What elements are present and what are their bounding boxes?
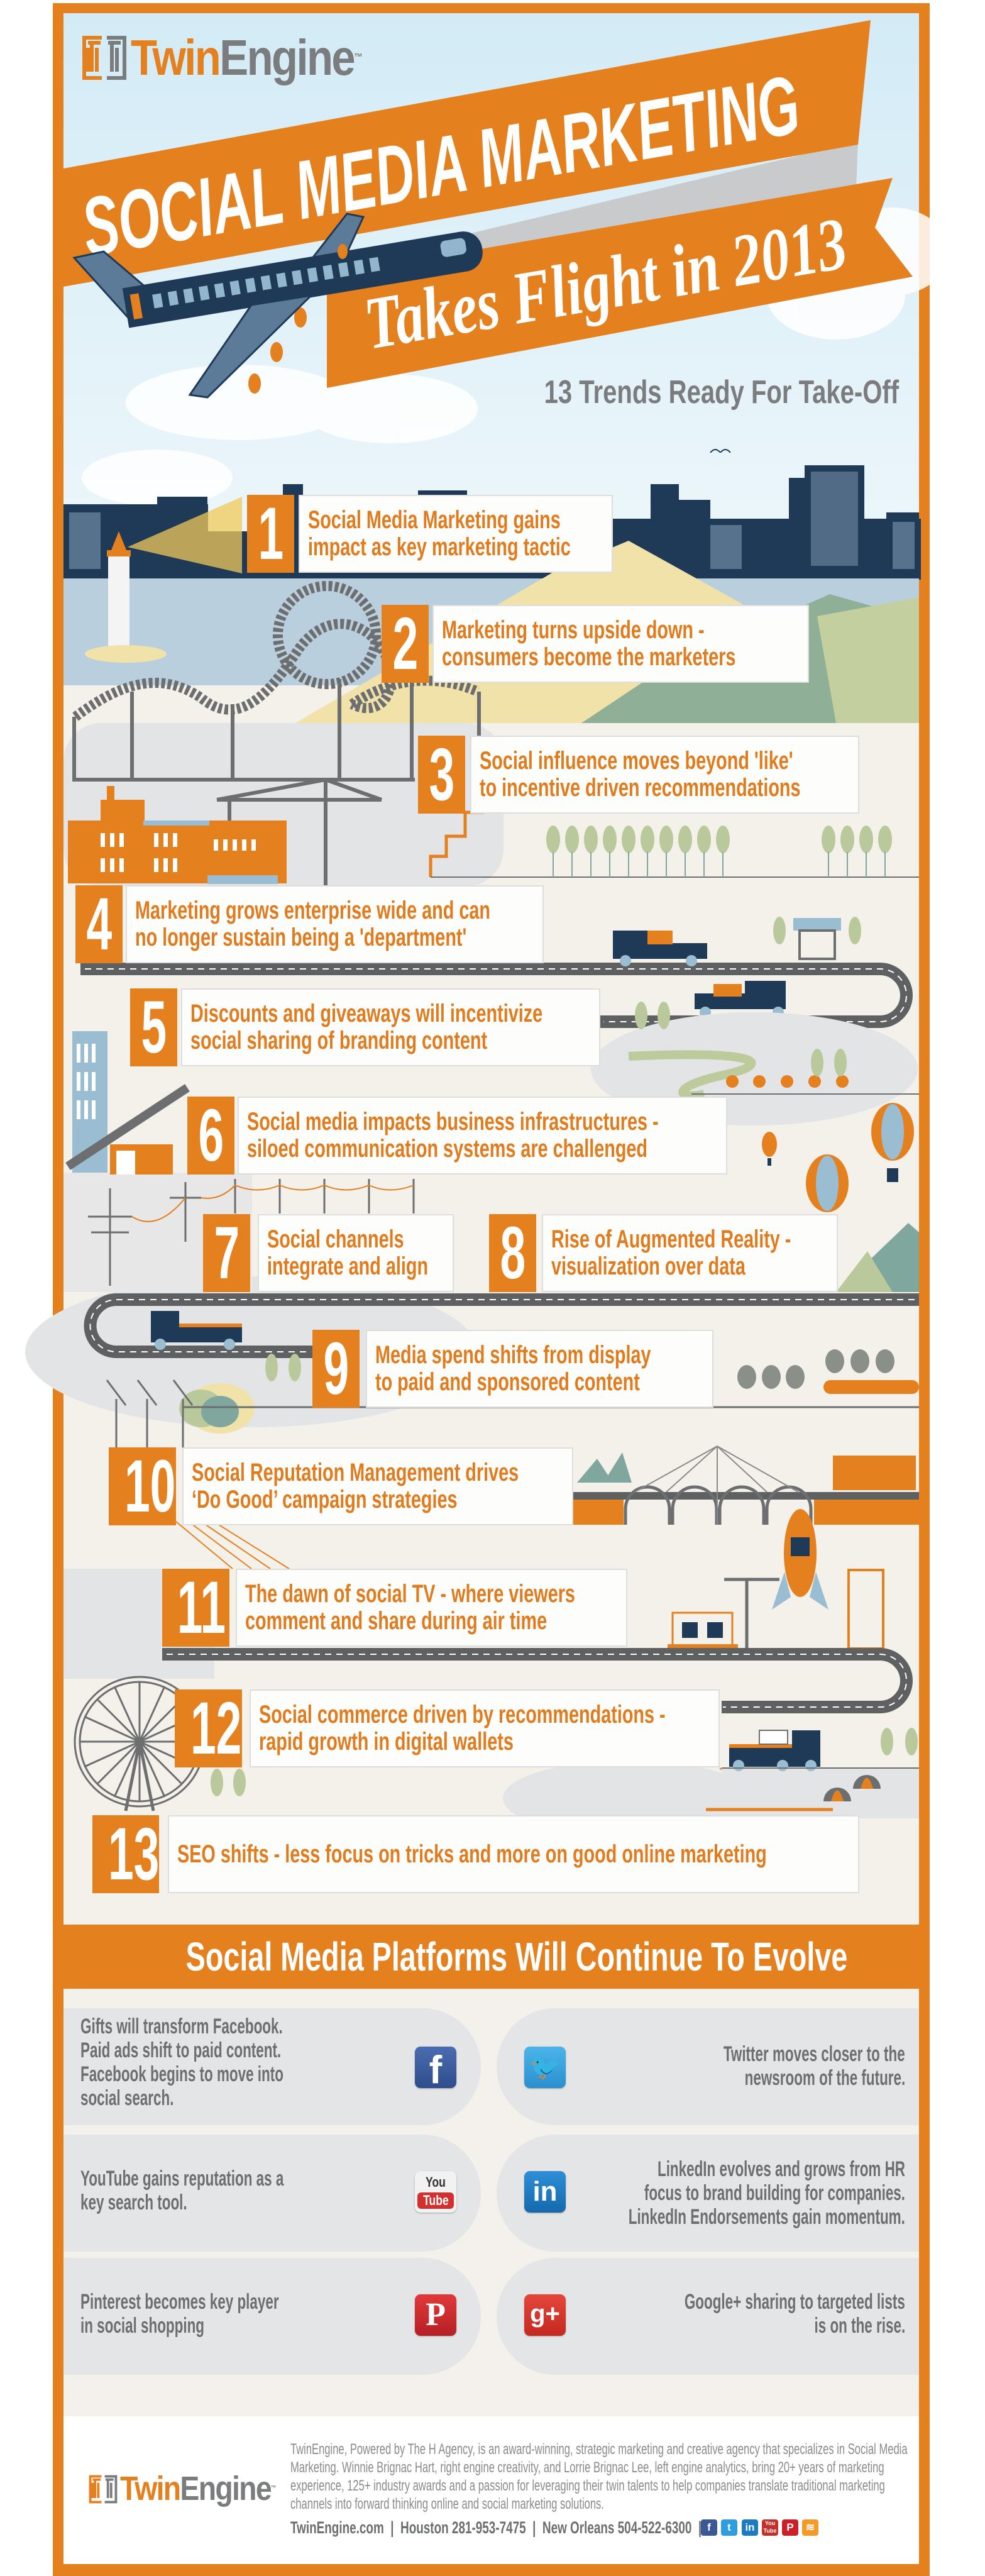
text 4: no longer sustain being a 'department': [135, 924, 466, 951]
factory: [68, 786, 287, 884]
footer social icons: ≋: [806, 2521, 815, 2533]
text 6: Social media impacts business infrastructures -: [247, 1108, 659, 1136]
icon: linkedin: [524, 2171, 566, 2213]
bridge: [573, 1446, 919, 1525]
birds: [660, 450, 730, 464]
text 8: [542, 1214, 838, 1292]
text 3: to incentive driven recommendations: [480, 774, 801, 802]
icon: linkedin: in: [532, 2176, 558, 2207]
logo text: TwinEngine™: [131, 30, 361, 86]
footer description: TwinEngine, Powered by The H Agency, is an award-winning, strategic marketing and creative agency that specializes in Social Media: [290, 2441, 908, 2458]
truck 2: [695, 981, 786, 1018]
trend 2: [382, 605, 809, 683]
text 7: integrate and align: [267, 1252, 428, 1280]
footer description: channels into forward thinking online and social marketing solutions.: [290, 2496, 604, 2512]
trend 7: [203, 1214, 454, 1292]
row 2 right: linkedin: LinkedIn evolves and grows from HR: [658, 2157, 905, 2181]
text 1: Social Media Marketing gains: [308, 506, 561, 534]
row 1 left: facebook: Gifts will transform Facebook.: [80, 2015, 283, 2038]
platforms heading: Social Media Platforms Will Continue To Evolve: [186, 1934, 847, 1979]
footer: [63, 2416, 919, 2564]
parachutes: [823, 1728, 918, 1801]
subtitle: 13 Trends Ready For Take-Off: [544, 374, 899, 411]
water: [63, 578, 919, 685]
row 1 left: facebook: Facebook begins to move into: [80, 2062, 283, 2086]
text 10: [182, 1447, 573, 1525]
icon: youtube: You: [426, 2174, 446, 2190]
platforms heading: [63, 1925, 919, 1989]
text 10: ‘Do Good’ campaign strategies: [192, 1486, 457, 1513]
number 8: [489, 1214, 536, 1292]
footer description: Marketing. Winnie Brignac Hart, right engine creativity, and Lorrie Brignac Lee, left engine analytics, bring 20+ years of marketing: [290, 2459, 884, 2476]
office building and escalator: [68, 1031, 187, 1175]
text 6: [238, 1097, 727, 1175]
row 3 right: google plus: is on the rise.: [814, 2314, 905, 2338]
road 2: [91, 1300, 919, 1352]
trend 12: [175, 1689, 720, 1767]
icon: google plus: g+: [530, 2300, 560, 2328]
hills: [295, 541, 817, 723]
icon: twinengine mark: [82, 36, 126, 80]
text 2: [432, 605, 809, 683]
platforms panel: [63, 1989, 919, 2416]
hills, trees, turbines near 9: [179, 1354, 919, 1434]
text 13: [168, 1815, 859, 1893]
river and cyclists: [629, 1054, 752, 1096]
text 5: social sharing of branding content: [190, 1027, 487, 1054]
road 1: [80, 969, 906, 1022]
row 1 right: twitter: newsroom of the future.: [744, 2066, 905, 2090]
row 1 right: twitter: [497, 2008, 919, 2125]
footer social icons: You: [765, 2520, 775, 2526]
text 7: [258, 1214, 454, 1292]
text 7: Social channels: [267, 1225, 404, 1253]
footer social icons: in: [745, 2521, 755, 2533]
trend 4: [75, 885, 544, 963]
title banners: [63, 20, 913, 453]
clouds: [82, 207, 949, 506]
row 2 left: youtube: YouTube gains reputation as a: [80, 2167, 283, 2191]
text 12: [250, 1689, 720, 1767]
icon: twitter: [524, 2047, 566, 2088]
number 6: [187, 1097, 234, 1175]
icon: facebook: f: [429, 2048, 442, 2092]
footer description: experience, 125+ industry awards and a passion for leveraging their twin talents to help companies translate traditional marketing: [290, 2477, 885, 2494]
row 1 left: facebook: [63, 2008, 481, 2125]
text 5: [181, 988, 600, 1066]
money bags and conveyor: [737, 1349, 894, 1389]
stairs: [431, 812, 484, 877]
row 3 right: google plus: Google+ sharing to targeted lists: [685, 2290, 905, 2314]
footer social icons: f: [707, 2521, 711, 2533]
number 9: [312, 1330, 360, 1408]
balloons: [762, 1103, 914, 1212]
text 9: to paid and sponsored content: [375, 1368, 640, 1396]
text 11: [236, 1569, 627, 1647]
scenery illustration: [25, 207, 930, 1818]
trend 1: [247, 495, 613, 573]
number 2: [382, 605, 429, 683]
footer social icons: [701, 2519, 818, 2536]
banner shadow: [434, 141, 858, 283]
text 8: visualization over data: [551, 1252, 746, 1280]
icon: facebook: [415, 2047, 456, 2088]
road 3: [162, 1654, 906, 1707]
truck 4: [722, 1730, 919, 1771]
truck 3: [151, 1311, 242, 1350]
sky background: [63, 13, 919, 579]
ferris wheel: [75, 1677, 204, 1811]
row 1 right: twitter: Twitter moves closer to the: [724, 2042, 905, 2066]
row 3 right: google plus: [497, 2258, 919, 2375]
icon: youtube: [415, 2171, 456, 2213]
text 2: Marketing turns upside down -: [442, 616, 705, 644]
text 11: The dawn of social TV - where viewers: [245, 1580, 575, 1608]
text 9: Media spend shifts from display: [375, 1341, 651, 1369]
footer social icons: Tube: [764, 2528, 776, 2534]
ground background: [63, 578, 919, 1925]
text 12: Social commerce driven by recommendations -: [259, 1701, 666, 1728]
text 9: [366, 1330, 713, 1408]
row 1 left: facebook: Paid ads shift to paid content.: [80, 2038, 281, 2062]
truck 1: [613, 931, 707, 966]
footer logo: TwinEngine™: [120, 2470, 275, 2507]
trend 9: [312, 1330, 713, 1408]
trend 11: [162, 1569, 627, 1647]
icon: google plus: [524, 2294, 566, 2336]
text 1: impact as key marketing tactic: [308, 533, 571, 561]
crane: [217, 780, 382, 887]
icon: twitter: 🐦: [529, 2054, 561, 2081]
text 4: [126, 885, 544, 963]
row 2 right: linkedin: [497, 2135, 919, 2252]
number 4: [75, 885, 123, 963]
icon: pinterest: P: [426, 2297, 446, 2333]
row 3 left: pinterest: in social shopping: [80, 2314, 204, 2338]
diagonal stripes: [176, 1522, 773, 1814]
number 7: [203, 1214, 250, 1292]
power lines: [88, 1179, 414, 1286]
row 2 left: youtube: key search tool.: [80, 2191, 187, 2214]
row 2 right: linkedin: LinkedIn Endorsements gain momentum.: [629, 2205, 905, 2229]
text 3: [470, 736, 859, 814]
header logo: [82, 30, 362, 86]
icon: pinterest: [415, 2294, 456, 2336]
text 12: rapid growth in digital wallets: [259, 1728, 514, 1755]
row 2 right: linkedin: focus to brand building for companies.: [644, 2181, 905, 2205]
row 3 left: pinterest: [63, 2258, 481, 2375]
plane: [74, 214, 485, 397]
gray ground blobs: [591, 1012, 918, 1125]
trend 8: [489, 1214, 838, 1292]
number 1: [247, 495, 294, 573]
row 1 left: facebook: social search.: [80, 2086, 173, 2110]
roller coaster: [75, 586, 478, 717]
lower gray ground: [722, 1768, 919, 1818]
text 2: consumers become the marketers: [442, 643, 735, 671]
lighthouse: [85, 497, 242, 663]
text 6: siloed communication systems are challenged: [247, 1135, 647, 1163]
pavilion: [773, 917, 861, 959]
trend 6: [187, 1097, 727, 1175]
trend 13: [92, 1815, 859, 1893]
text 4: Marketing grows enterprise wide and can: [135, 897, 490, 924]
footer social icons: P: [786, 2521, 794, 2533]
contact line: TwinEngine.com | Houston 281-953-7475 | New Orleans 504-522-6300 |: [290, 2518, 702, 2537]
rocket and towers: [668, 1509, 883, 1650]
trend 5: [130, 988, 600, 1066]
number 5: [130, 988, 177, 1066]
footer description: [290, 2441, 908, 2512]
text 8: Rise of Augmented Reality -: [551, 1225, 791, 1253]
text 11: comment and share during air time: [245, 1607, 547, 1635]
trend 3: [418, 736, 859, 814]
skyline: [63, 465, 921, 580]
gray ground patch: [63, 723, 504, 887]
trend 10: [109, 1447, 573, 1525]
number 3: [418, 736, 465, 814]
footer social icons: t: [727, 2521, 731, 2533]
text 10: Social Reputation Management drives: [192, 1459, 519, 1486]
icon: youtube: Tube: [423, 2192, 448, 2208]
trees row: [546, 826, 892, 853]
row 2 left: youtube: [63, 2135, 481, 2252]
row 3 left: pinterest: Pinterest becomes key player: [80, 2290, 279, 2314]
text 5: Discounts and giveaways will incentivize: [190, 1000, 542, 1027]
text 1: [299, 495, 613, 573]
text 13: SEO shifts - less focus on tricks and more on good online marketing: [177, 1840, 767, 1867]
mountains: [836, 1223, 919, 1292]
text 3: Social influence moves beyond 'like': [480, 747, 793, 775]
banner 2: Takes Flight in 2013: [358, 202, 852, 365]
